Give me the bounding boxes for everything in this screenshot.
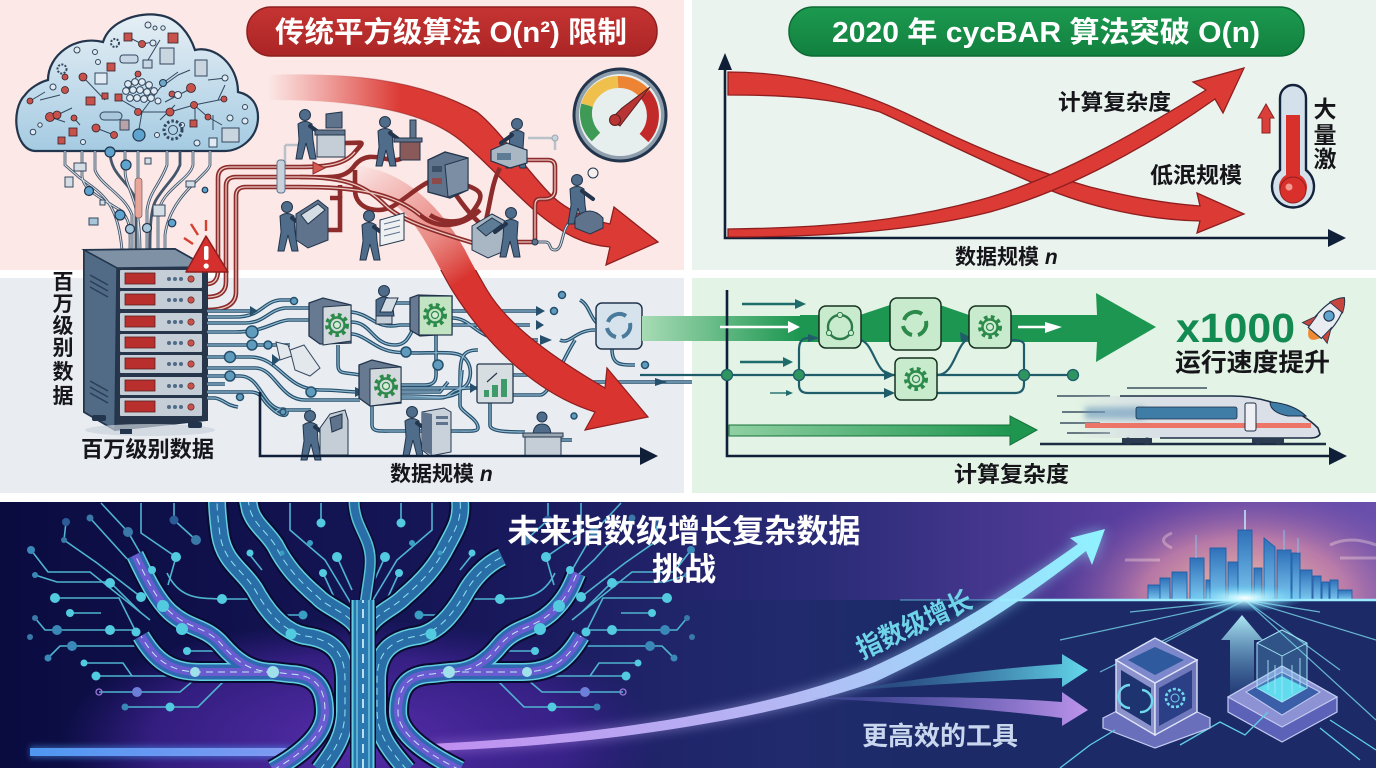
icon: upward arrow <box>1221 615 1263 700</box>
lower green arrow <box>729 416 1037 445</box>
label: runtime speed-up: 运行速度提升 <box>1175 349 1330 377</box>
vertical label: million-scale data: 万 <box>52 293 74 316</box>
standing worker at console <box>301 410 348 460</box>
vertical label: million-scale data <box>52 271 74 408</box>
panel: 2020 cycBAR chart <box>692 0 1376 270</box>
title pill: quadratic: 传统平方级算法 O(n²) 限制 <box>275 16 627 49</box>
arrow: purple tool arrow <box>810 692 1088 726</box>
central branch <box>354 500 370 640</box>
label: more efficient tools: 更高效的工具 <box>862 721 1018 751</box>
flow nodes <box>224 292 648 419</box>
presenter with board <box>360 210 404 260</box>
worker on machine <box>491 118 527 168</box>
vertical label: surge: 量 <box>1314 122 1336 148</box>
title pill: cycBAR <box>789 7 1304 56</box>
vertical label: million-scale data: 别 <box>52 337 74 360</box>
worker bending <box>376 116 422 166</box>
gear cube one <box>309 298 351 345</box>
server tower <box>428 152 468 198</box>
title: future exponential data challenge: 挑战 <box>652 551 716 587</box>
green flow <box>640 290 1347 465</box>
thin branches <box>31 503 352 707</box>
vertical label: surge: 激 <box>1314 146 1336 172</box>
trunk <box>357 600 369 768</box>
vertical label: surge <box>1314 96 1336 172</box>
device: data prism <box>1180 630 1376 760</box>
process node: recycle <box>890 298 941 350</box>
purple main branches <box>135 555 581 768</box>
green band from left <box>642 316 822 341</box>
gear cube two <box>359 360 401 406</box>
icon: thermometer <box>1258 85 1314 207</box>
panel: linear speed-up <box>692 278 1376 493</box>
title pill: cycBAR: 2020 年 cycBAR 算法突破 O(n) <box>832 16 1260 49</box>
axis: complexity <box>727 290 1347 465</box>
glowing streak <box>30 746 295 758</box>
terminal operator <box>278 200 328 251</box>
arrow: falling curve <box>728 72 1244 233</box>
device: processing cube <box>1060 638 1210 768</box>
label: million-scale data: 百万级别数据 <box>81 437 214 462</box>
arrow: rising curve <box>728 68 1244 237</box>
big green arrow <box>800 293 1156 362</box>
label: compute complexity: 计算复杂度 <box>1058 90 1171 115</box>
red arrow: lower band faded upper part <box>345 165 476 270</box>
icon: rocket <box>1298 287 1357 349</box>
red arrow: upper quadratic band <box>268 74 658 265</box>
vertical label: surge: 大 <box>1314 96 1336 122</box>
teal arrow heads <box>808 332 970 398</box>
label: compute complexity axis: 计算复杂度 <box>954 462 1069 487</box>
cloud of data <box>16 14 258 151</box>
title: future exponential data challenge <box>508 513 860 587</box>
crossing chart <box>718 53 1346 269</box>
red arrow: lower quadratic band solid part <box>440 270 649 431</box>
train <box>1040 388 1326 444</box>
chart axes <box>718 53 1346 247</box>
panel: traditional quadratic algorithm limit <box>0 0 684 270</box>
label: low scale: 低泯规模 <box>1150 163 1242 188</box>
small input arrows <box>720 299 1062 396</box>
wires from cloud to server <box>65 147 210 250</box>
data flow network <box>207 286 692 460</box>
title: future exponential data challenge: 未来指数级增长复杂数据 <box>508 513 860 549</box>
banner: future challenge <box>0 502 1376 768</box>
worker at lectern <box>523 412 563 456</box>
workers and machines at upper flow <box>278 69 666 260</box>
label: exponential growth: 指数级增长 <box>852 585 977 665</box>
rack units <box>120 270 202 416</box>
icon: warning triangle <box>184 220 228 272</box>
chart card <box>477 364 513 403</box>
arrow: cyan tool arrow <box>850 654 1088 690</box>
axis: data scale <box>260 392 658 465</box>
vertical label: million-scale data: 数 <box>52 361 74 384</box>
panel: data scale flows <box>0 278 684 493</box>
vertical label: million-scale data: 据 <box>52 385 74 408</box>
process node: gear <box>969 306 1011 348</box>
flow arrow tips <box>250 306 667 397</box>
worker with tower <box>403 406 451 456</box>
process node: ring <box>819 306 861 348</box>
tree nodes <box>27 514 342 712</box>
document stack <box>276 342 320 376</box>
teal routing lines <box>640 338 1073 393</box>
worker at desk <box>296 110 345 159</box>
gauge <box>574 69 666 161</box>
seated worker with laptop <box>376 286 398 324</box>
red pipes <box>207 125 575 310</box>
horizon burst <box>1000 584 1376 720</box>
circuit tree <box>27 500 695 768</box>
process node: lower gear <box>895 358 937 400</box>
vertical label: million-scale data: 级 <box>52 315 74 338</box>
vertical label: million-scale data: 百 <box>52 271 74 294</box>
skyline <box>1125 510 1376 600</box>
server rack <box>84 249 215 436</box>
label: data scale n: 数据规模 n <box>390 463 493 486</box>
label: data scale n: 数据规模 n <box>955 246 1058 269</box>
blue main branches <box>217 500 502 768</box>
metric: x1000: x1000 <box>1176 305 1295 351</box>
exponential growth arrow <box>430 529 1105 751</box>
worker with scooter <box>568 168 603 234</box>
route nodes <box>722 370 1078 380</box>
console operator <box>472 208 520 258</box>
green gear cube <box>410 295 452 336</box>
title pill: quadratic <box>247 7 657 56</box>
cycle block <box>596 303 642 349</box>
